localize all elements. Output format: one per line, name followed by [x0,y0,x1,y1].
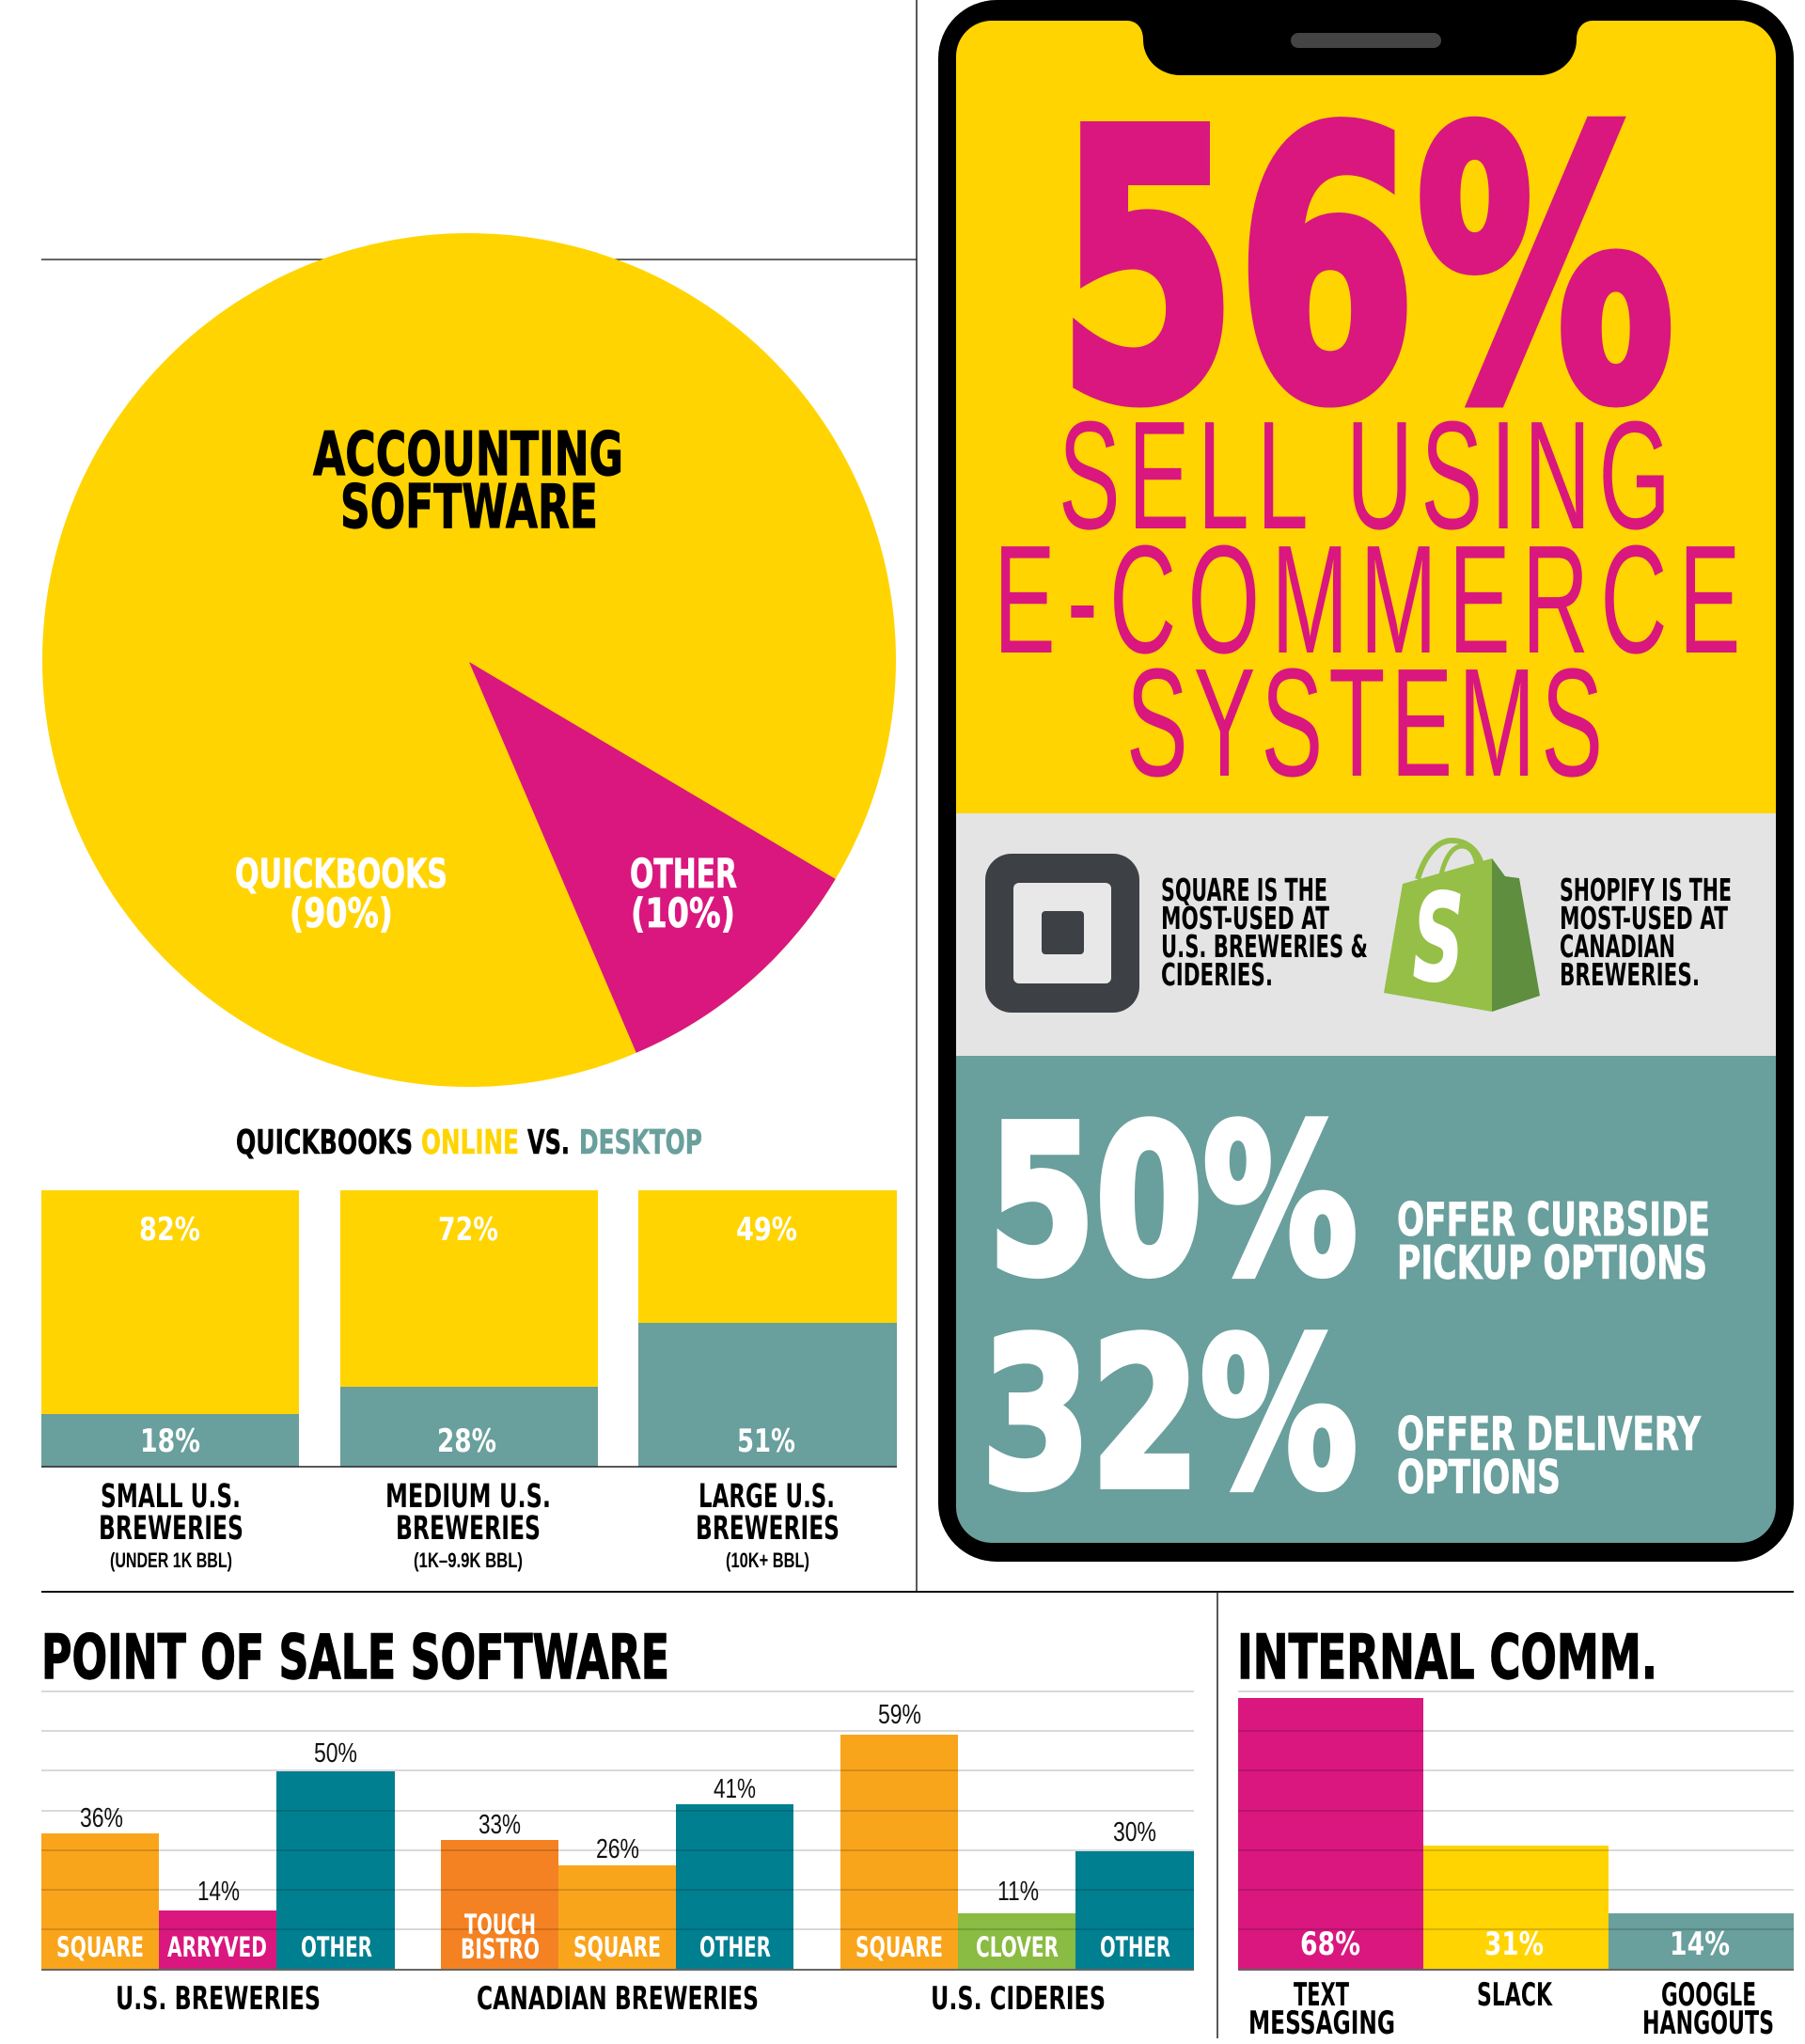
phone speaker [1291,33,1441,48]
heading: quickbooks online vs desktop: VS. [527,1124,570,1162]
pie label: other: (10%) [631,890,735,937]
label: small: (UNDER 1K BBL) [110,1549,232,1572]
bar: slack [1423,1846,1609,1970]
stat: 50% curbside: 50% [988,1083,1358,1321]
bar labels: OTHER [1100,1931,1170,1963]
headline: sell using e-commerce systems [994,389,1740,809]
phone [938,0,1794,1562]
label: large: (10K+ BBL) [726,1549,809,1572]
pie label: quickbooks: QUICKBOOKS [235,851,447,898]
stat: 32% delivery [981,1297,1701,1534]
bar: large breweries: 51% [737,1423,795,1460]
heading: quickbooks online vs desktop [236,1124,702,1162]
pie title: SOFTWARE [340,473,598,542]
pie label: other [630,851,737,937]
value labels: 50% [314,1738,357,1769]
group labels: U.S. BREWERIES [116,1980,321,2018]
value labels: 41% [714,1774,756,1804]
text: square is the most-used [1161,872,1368,993]
bar: google hangouts [1609,1913,1794,1970]
bar labels: SQUARE [855,1931,943,1963]
bars: canadian breweries [441,1804,793,1970]
label: small: SMALL U.S. [101,1478,241,1516]
heading: quickbooks online vs desktop: ONLINE [421,1124,519,1162]
pie chart: accounting software [42,233,896,1109]
pie title [313,420,623,542]
bars: u.s. breweries [41,1771,395,1970]
text: shopify is the most-used: CANADIAN [1560,928,1675,965]
percent labels: 14% [1670,1926,1730,1963]
category labels: TEXT [1294,1976,1349,2014]
bar: medium breweries [340,1190,598,1467]
value labels: 36% [80,1803,123,1833]
bar chart: point of sale [41,1691,1194,2018]
group labels: U.S. CIDERIES [931,1980,1106,2018]
pie label: other: OTHER [630,851,737,898]
headline: sell using e-commerce systems: E-COMMERCE [994,513,1740,685]
bar labels: CLOVER [976,1931,1059,1963]
icon: square logo [985,854,1139,1013]
value labels: 14% [197,1877,240,1907]
text: square is the most-used: U.S. BREWERIES & [1161,928,1368,965]
phone screen panels [956,21,1776,1543]
phone notch [1127,21,1593,75]
heading: quickbooks online vs desktop: QUICKBOOKS [236,1124,413,1162]
value labels [80,1700,1156,1907]
text: shopify is the most-used: BREWERIES. [1560,956,1700,993]
group labels [116,1980,1106,2018]
bar labels: OTHER [301,1931,372,1963]
value labels: 59% [878,1700,921,1730]
text: shopify is the most-used [1560,872,1732,993]
category labels: MESSAGING [1248,2005,1395,2042]
bar: medium breweries: 28% [437,1423,496,1460]
headline: sell using e-commerce systems: SELL USING [1059,389,1671,561]
percent labels [1300,1926,1730,1963]
category labels [1248,1976,1774,2042]
icon: shopify bag: S [1413,869,1464,1009]
text: square is the most-used: CIDERIES. [1161,956,1273,993]
heading: quickbooks online vs desktop: DESKTOP [579,1124,702,1162]
category labels: SLACK [1477,1976,1553,2014]
bar labels: TOUCH [464,1909,536,1941]
bar: small breweries [41,1190,299,1467]
bar labels: BISTRO [461,1933,540,1965]
headline: sell using e-commerce systems: SYSTEMS [1126,637,1603,809]
bar labels: SQUARE [56,1931,144,1963]
text: square is the most-used: SQUARE IS THE [1161,872,1327,908]
stat: 50% curbside [988,1083,1710,1321]
label: medium: MEDIUM U.S. [385,1478,551,1516]
value labels: 11% [997,1877,1039,1907]
bar: text messaging [1238,1698,1423,1970]
percent labels: 31% [1484,1926,1544,1963]
bar: large breweries: 49% [736,1211,797,1249]
bar: medium breweries: 72% [438,1211,498,1249]
bar: small breweries: 82% [139,1211,200,1249]
label: medium: (1K–9.9K BBL) [414,1549,523,1572]
label: small [99,1478,243,1572]
value labels: 26% [596,1834,639,1864]
stat: 32% delivery: 32% [981,1297,1358,1534]
pie title: ACCOUNTING [313,420,623,490]
bar labels: SQUARE [573,1931,661,1963]
stacked bar chart: online vs desktop [41,1190,897,1572]
bar labels: OTHER [699,1931,771,1963]
bar labels: ARRYVED [167,1931,267,1963]
pie label: quickbooks: (90%) [290,890,393,937]
bar chart: internal communication [1238,1691,1794,2042]
label: large: BREWERIES [696,1510,840,1548]
label: medium [385,1478,551,1572]
label: medium: BREWERIES [396,1510,541,1548]
bar: large breweries [638,1190,897,1467]
icon: shopify bag [1384,841,1540,1012]
pie slice: other 10% [469,662,836,1053]
label: large [696,1478,840,1572]
value labels: 33% [479,1810,521,1840]
label: large: LARGE U.S. [698,1478,835,1516]
bar labels [56,1909,1170,1965]
heading: point of sale software: POINT OF SALE SOFTWARE [41,1623,669,1693]
text: square is the most-used: MOST-USED AT [1161,900,1329,936]
value labels: 30% [1113,1817,1156,1847]
percent labels: 68% [1300,1926,1360,1963]
group labels: CANADIAN BREWERIES [477,1980,759,2018]
bars: u.s. cideries [840,1735,1194,1970]
bar: small breweries: 18% [140,1423,200,1460]
label: small: BREWERIES [99,1510,243,1548]
pie label: quickbooks [235,851,447,937]
stat: 32% delivery: OPTIONS [1397,1451,1561,1504]
